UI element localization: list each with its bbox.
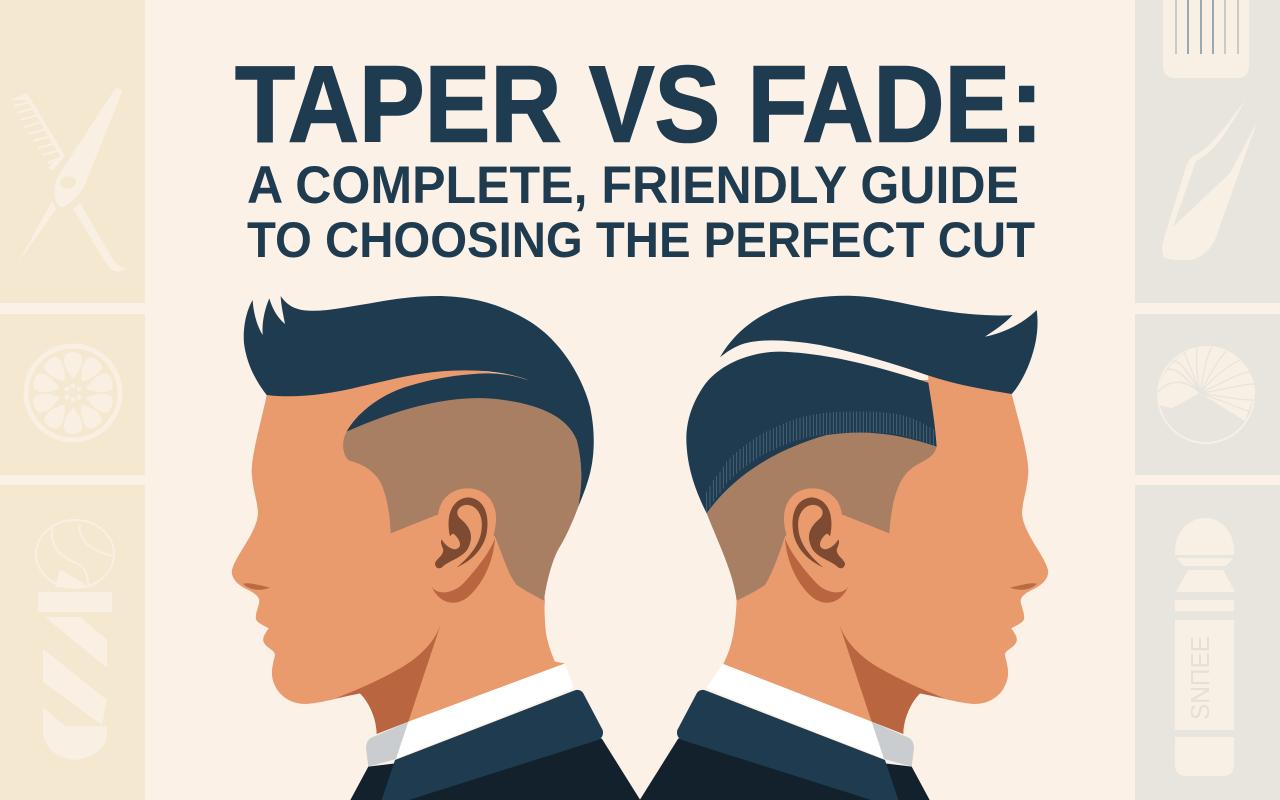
subtitle line 2: TO CHOOSING THE PERFECT CUT [247,212,1035,268]
subtitle line 1: A COMPLETE, FRIENDLY GUIDE [247,156,1019,215]
ear [432,488,496,603]
icon: comb and scissors [11,88,126,272]
neck shadow [838,622,945,734]
icon: comb [1163,0,1249,78]
nose shadow [1010,583,1037,590]
mirrored head, neck and suit [639,347,1048,800]
lower hair [686,352,937,513]
nose shadow [243,583,270,590]
icon: product bottle [1175,518,1235,776]
icon: flower wheel [26,346,120,440]
neck shadow [335,622,442,734]
faded hair area [343,398,581,601]
icon: razor [1162,99,1257,260]
icon: barber pole [36,520,114,760]
face and neck [723,347,1048,734]
illustration: taper profile facing left [232,296,641,800]
upper hair [720,296,1038,394]
faded hair area [707,433,937,601]
icon: shell fan [1158,346,1255,443]
fade texture lines [707,412,933,513]
panel: right icon strip [1135,0,1280,800]
shirt collar [366,663,574,767]
panel: left icon strip [0,0,145,800]
bottle label text: SNПEE [1185,636,1215,720]
illustration: fade profile facing right [639,296,1048,800]
suit [350,690,641,800]
hair [244,296,594,507]
ear [784,488,848,603]
face and neck [232,347,565,734]
hair group [686,296,1038,603]
suit [639,690,930,800]
shirt collar [706,663,914,767]
title: TAPER VS FADE: [235,44,1043,166]
